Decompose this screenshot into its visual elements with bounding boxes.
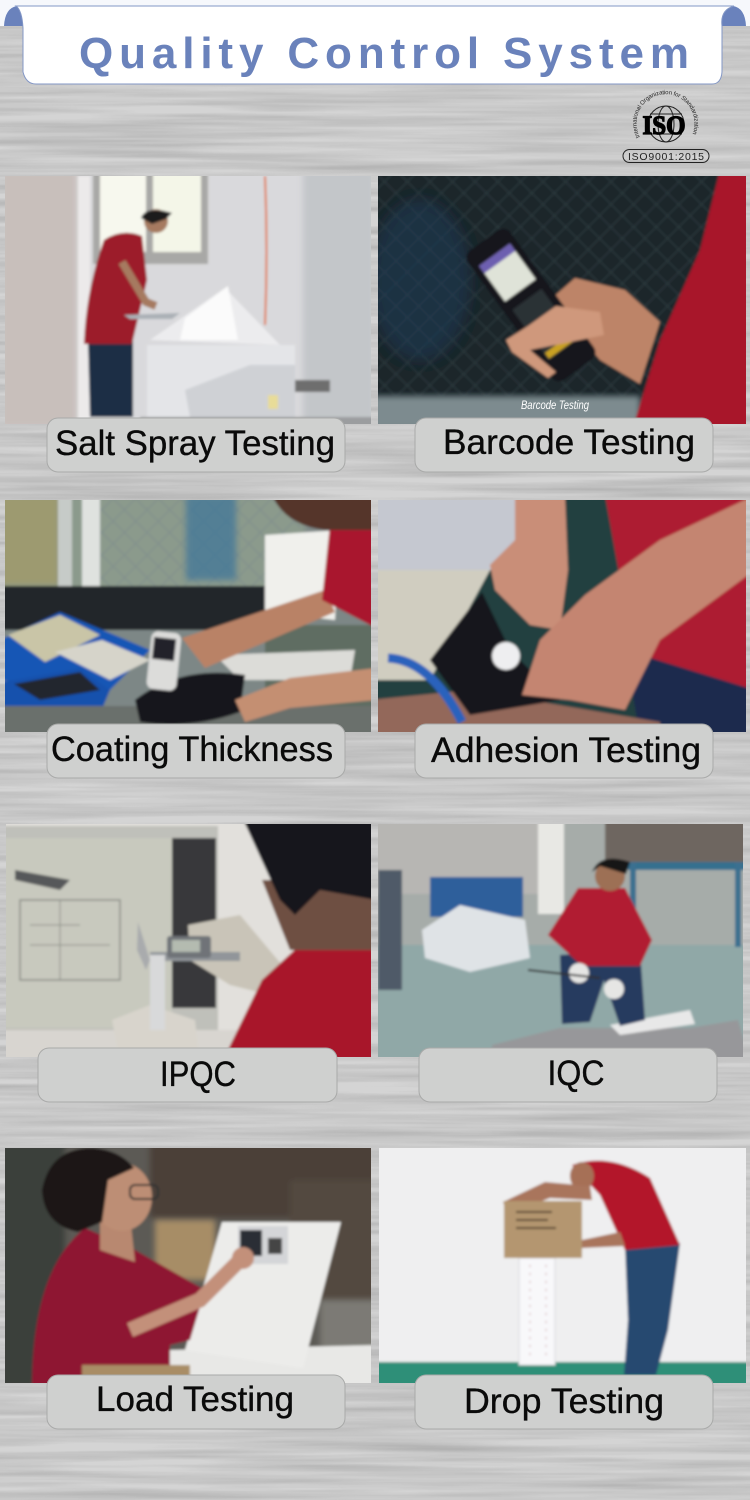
photo: coating thickness (0, 495, 376, 737)
black plate sample (135, 673, 245, 724)
blue tool handle (388, 658, 462, 722)
label: Barcode Testing: Barcode Testing (443, 423, 695, 462)
photo: salt spray testing (0, 170, 376, 428)
heat sink sample (422, 905, 530, 972)
gloved hands and caliper (112, 914, 281, 1030)
hands (490, 495, 750, 710)
test rig (170, 1222, 376, 1388)
blue instrument cases (0, 612, 150, 714)
icon: ISO globe: International Organization for Standardization (632, 90, 699, 138)
label: Load Testing: Load Testing (96, 1380, 294, 1419)
icon: ISO globe: ISO (642, 111, 686, 140)
label: Drop Testing: Drop Testing (464, 1382, 664, 1421)
handheld barcode scanner (463, 225, 599, 385)
label: Adhesion Testing (415, 724, 713, 778)
label: Barcode Testing (415, 418, 713, 472)
photo: adhesion testing (370, 495, 750, 737)
black perforated plate (430, 592, 560, 715)
photo caption: barcode testing: Barcode Testing (521, 400, 589, 412)
title: Quality Control System (79, 29, 689, 78)
white test disc (492, 642, 520, 670)
inspector (84, 209, 180, 417)
technician arm (182, 495, 376, 722)
hand (550, 278, 660, 384)
label: Load Testing (47, 1375, 345, 1429)
label: Adhesion Testing: Adhesion Testing (431, 731, 701, 770)
banner corner tabs (4, 6, 746, 26)
female inspector (32, 1148, 254, 1388)
parts on floor (492, 1020, 743, 1057)
photo: IPQC (0, 819, 376, 1062)
salt spray chamber (140, 286, 375, 427)
photo: IQC (370, 819, 750, 1062)
ISO 9001:2015 badge (622, 90, 710, 163)
inspector from behind (228, 824, 371, 1057)
coating thickness gauge (146, 631, 182, 691)
label: Salt Spray Testing: Salt Spray Testing (55, 424, 335, 463)
inspector crouching (528, 859, 652, 1026)
label: Coating Thickness (47, 724, 345, 778)
label: Salt Spray Testing (47, 418, 345, 472)
label: IQC (419, 1048, 717, 1102)
banner ribbon (16, 6, 734, 84)
label: IQC: IQC (548, 1054, 604, 1093)
photo: barcode testing (370, 170, 750, 430)
title banner (4, 6, 746, 84)
label: IPQC (38, 1048, 337, 1102)
label: Drop Testing (415, 1375, 713, 1429)
drop height ruler (519, 1258, 555, 1365)
inspector bending over (503, 1161, 680, 1375)
cardboard box (504, 1201, 582, 1258)
photo: load testing (0, 1143, 376, 1388)
photo: drop testing (372, 1143, 750, 1388)
ISO certificate pill: ISO9001:2015 (628, 151, 704, 163)
label: IPQC: IPQC (160, 1055, 236, 1094)
label: Coating Thickness: Coating Thickness (51, 730, 333, 769)
